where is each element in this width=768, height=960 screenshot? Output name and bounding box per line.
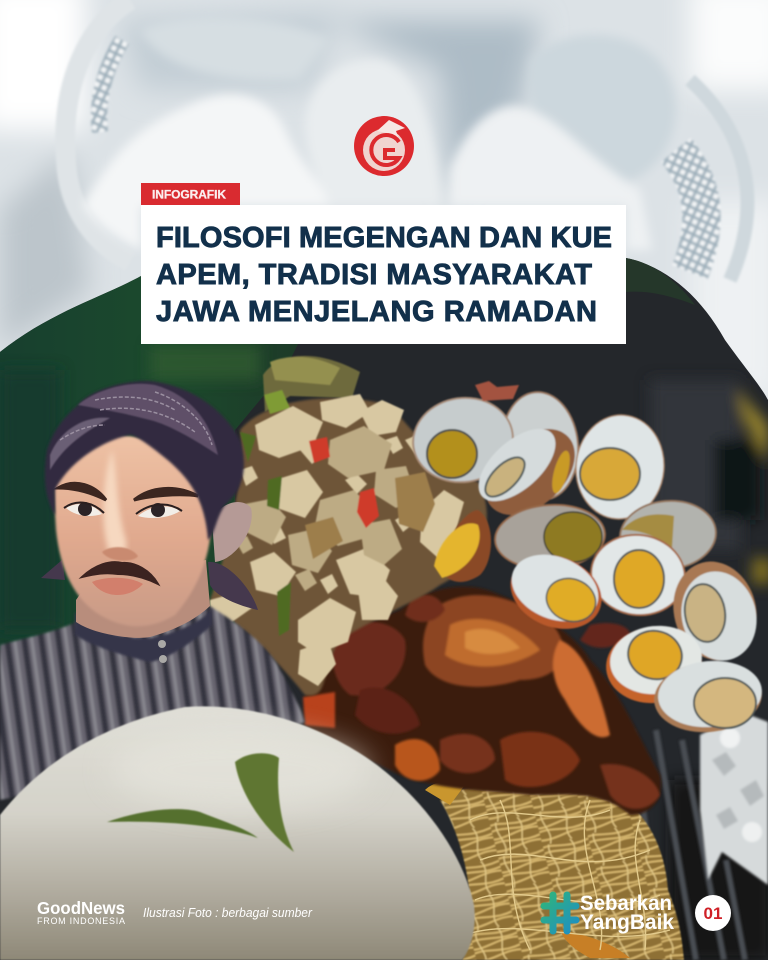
title block (141, 116, 626, 344)
footer (37, 892, 731, 934)
portrait: brows and eyes (58, 483, 198, 518)
logo: GoodNews from Indonesia: FROM INDONESIA (37, 916, 125, 926)
food: fried chicken (303, 587, 661, 815)
portrait: shirt (0, 606, 305, 800)
tag: infografik (141, 183, 240, 205)
title panel (141, 205, 626, 344)
tag: infografik: INFOGRAFIK (152, 188, 226, 202)
logo: GoodNews from Indonesia: GoodNews (37, 898, 125, 918)
title panel: JAWA MENJELANG RAMADAN (156, 296, 597, 328)
food: rice (700, 712, 768, 885)
campaign label (580, 892, 674, 934)
logo: GoodNews from Indonesia (37, 898, 125, 926)
logo badge (354, 116, 414, 176)
banana leaf plate (0, 258, 768, 960)
page number: 01 (704, 904, 722, 923)
portrait: batik headcloth (45, 381, 244, 540)
portrait: neck and face (53, 434, 252, 638)
apem: pandan leaf (107, 753, 294, 852)
hashtag icon (544, 895, 576, 931)
portrait: cloth ties (41, 560, 258, 610)
faded monochrome background photo (0, 0, 768, 420)
kue apem (0, 706, 475, 960)
basket rim (65, 0, 747, 280)
title panel: FILOSOFI MEGENGAN DAN KUE (156, 222, 612, 254)
portrait illustration: Javanese man (0, 381, 305, 800)
title panel: APEM, TRADISI MASYARAKAT (156, 259, 592, 291)
food: salted eggs (408, 381, 768, 737)
campaign label: YangBaik (580, 911, 674, 934)
photo credit: Ilustrasi Foto : berbagai sumber (143, 906, 313, 920)
food: noodles (425, 781, 684, 960)
page number (695, 895, 731, 931)
portrait: moustache and mouth (82, 562, 158, 595)
pale food shapes (83, 17, 676, 250)
food: tempeh crumble (210, 356, 487, 696)
campaign label: Sebarkan (580, 892, 672, 915)
food: dark tray ridges (632, 730, 745, 960)
